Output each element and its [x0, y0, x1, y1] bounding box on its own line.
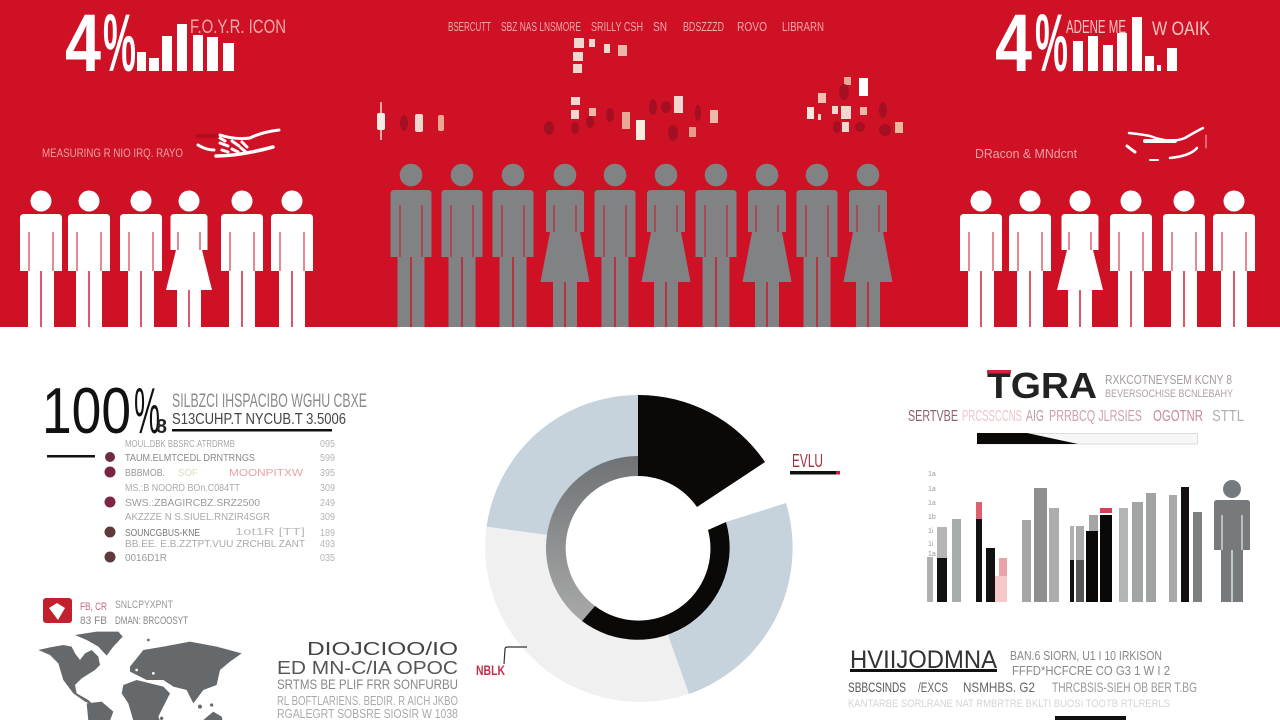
top centre caption: SN — [653, 19, 667, 34]
sub heading line: OGOTNR — [1153, 408, 1203, 425]
list rows: MS.:B NOORD BOn.C084TT — [125, 482, 240, 494]
list rows: TAUM.ELMTCEDL DRNTRNGS — [125, 452, 255, 464]
description text: RXKCOTNEYSEM KCNY 8 — [1105, 372, 1232, 387]
panel: centre-left text block: RL BOFTLARIENS. BEDIR. R AICH JKBO — [277, 693, 458, 708]
left top label: F.O.Y.R. ICON — [190, 17, 286, 38]
heading underline — [850, 669, 997, 672]
map legend text: 83 FB — [80, 615, 107, 627]
panel: centre-left text block: ED MN-C/IA OPOC — [277, 658, 458, 678]
left rule — [47, 455, 95, 458]
map legend text: FB, CR — [80, 601, 107, 613]
sub heading line: AIG — [1026, 408, 1044, 425]
list rows: AKZZZE N S.SIUEL.RNZIR4SGR — [125, 511, 270, 523]
scattered small icons — [377, 38, 903, 141]
right top label: W OAIK — [1152, 19, 1210, 40]
segment: lower-left light grey — [485, 527, 689, 702]
left big statistic 4%: 4 — [65, 0, 101, 89]
bottom right heading: HVIIJODMNA — [850, 646, 997, 674]
donut chart — [476, 395, 840, 702]
icon: right shoe squiggle — [1127, 128, 1206, 160]
right big statistic 4% — [995, 0, 1177, 89]
bold summary line: /EXCS — [918, 679, 948, 695]
map legend text — [80, 599, 188, 627]
y axis labels: 1b — [928, 514, 936, 521]
list rows: MOONPITXW — [229, 467, 303, 479]
donut label left: NBLK — [476, 662, 505, 678]
y axis labels — [928, 471, 936, 558]
sub heading line: PRCSSCCNS — [962, 408, 1022, 425]
list rows: 599 — [320, 453, 335, 464]
heading total: TGRA — [987, 365, 1097, 406]
left big statistic 4% — [65, 0, 234, 89]
y axis labels: 1a — [928, 551, 936, 558]
list rows: BB.EE. E.B.ZZTPT.VUU ZRCHBL ZANT — [125, 538, 306, 550]
bold summary line — [848, 679, 1197, 695]
list rows: 309 — [320, 483, 335, 494]
top centre caption: BSERCUTT — [448, 19, 491, 34]
donut label right: EVLU — [792, 451, 823, 471]
list rows: 249 — [320, 498, 335, 509]
faint footnote: KANTARBE SORLRANE NAT RMBRTRE BKLTI BUOSI TOOTB RTLRERLS — [848, 698, 1170, 710]
map legend text: DMAN: BRCOOSYT — [115, 615, 188, 627]
left sub label: MEASURING R NIO IRQ. RAYO — [42, 146, 183, 160]
list rows: 309 — [320, 512, 335, 523]
description text — [1105, 372, 1234, 400]
bold summary line: SBBCSINDS — [848, 679, 906, 695]
list rows: SWS.:ZBAGIRCBZ.SRZ2500 — [125, 497, 260, 509]
panel: centre-left text block: SRTMS BE PLIF FRR SONFURBU — [277, 676, 458, 692]
description lines — [1010, 649, 1170, 678]
sub heading line: STTL — [1212, 408, 1244, 425]
list rows — [104, 438, 335, 564]
right sub label: DRacon & MNdcnt — [975, 146, 1077, 161]
left big statistic 4%: % — [103, 0, 136, 89]
list sub heading: S13CUHP.T NYCUB.T 3.5006 — [172, 411, 346, 428]
right top label — [1066, 17, 1210, 40]
description lines: FFFD*HCFCRE CO G3 1 W I 2 — [1012, 664, 1170, 678]
top centre caption: SBZ NAS LNSMORE — [501, 19, 581, 34]
bar chart — [927, 471, 1250, 602]
inner ring: grey arc — [546, 456, 638, 621]
top centre caption: BDSZZZD — [683, 19, 724, 34]
progress bar — [977, 433, 1198, 444]
list rows: 189 — [320, 528, 335, 539]
panel: centre-left text block: DIOJCIOO/IO — [307, 639, 458, 659]
y axis labels: 1a — [928, 500, 936, 507]
top centre caption — [448, 19, 824, 34]
panel: red top band — [0, 0, 1280, 327]
y axis labels: 1a — [928, 471, 936, 478]
list rows: 493 — [320, 539, 335, 550]
bold summary line: NSMHBS. G2 — [963, 679, 1035, 695]
y axis labels: 1i — [928, 541, 934, 548]
icon: red badge — [43, 598, 72, 623]
centre group of grey people — [390, 164, 892, 327]
sub heading line — [908, 408, 1244, 425]
sub heading line: PRRBCQ JLRSIES — [1049, 408, 1142, 425]
sub heading line: SERTVBE — [908, 408, 958, 425]
heading rule — [172, 429, 332, 432]
bars — [927, 487, 1202, 602]
map legend text: SNLCPYXPNT — [115, 599, 173, 611]
y axis labels: 1a — [928, 486, 936, 493]
segment: right blue — [668, 503, 793, 694]
y axis labels: 1i — [928, 528, 934, 535]
panel: bottom right text block — [848, 646, 1197, 720]
list heading text: SILBZCI IHSPACIBO WGHU CBXE — [172, 391, 367, 412]
black footer tab — [1055, 716, 1126, 720]
panel: 100% statistic and list — [42, 374, 367, 564]
panel: world map block — [38, 598, 242, 720]
right top label: ADENE ME — [1066, 17, 1126, 37]
icon: grey person — [1214, 480, 1250, 602]
list rows: SOF — [178, 467, 198, 479]
segment: black wedge — [638, 395, 765, 507]
icon: left shoe squiggle — [197, 130, 279, 156]
world map — [38, 632, 242, 720]
top centre caption: ROVO — [737, 19, 767, 34]
list rows: 095 — [320, 439, 335, 450]
list rows: BBBMOB. — [125, 467, 165, 479]
panel: 100% statistic and list: % — [134, 374, 160, 447]
heading 100%: 100 — [42, 374, 131, 447]
top centre caption: SRILLY CSH — [591, 19, 643, 34]
list rows: SOUNCGBUS-KNE — [125, 527, 200, 539]
list rows: MOUL.DBK BBSRC.ATRDRMB — [125, 438, 235, 450]
inner ring: black arc — [582, 522, 730, 640]
left group of white people — [20, 190, 313, 327]
panel: total block top right — [908, 365, 1244, 444]
list rows: 1ot1R [TT] — [235, 526, 305, 538]
right big statistic 4%: 4 — [995, 0, 1032, 89]
donut label rule — [790, 471, 840, 474]
top centre caption: LIBRARN — [782, 19, 824, 34]
list rows: 0016D1R — [125, 552, 167, 564]
small mark beside heading: 8 — [156, 416, 167, 438]
right big statistic 4%: % — [1035, 0, 1068, 89]
description text: BEVERSOCHISE BCNLEBAHY — [1105, 388, 1234, 400]
bold summary line: THRCBSIS-SIEH OB BER T.BG — [1052, 679, 1197, 695]
segment: upper-left blue — [486, 395, 638, 535]
list rows: 395 — [320, 468, 335, 479]
leader line — [504, 647, 527, 664]
right group of white people — [960, 190, 1255, 327]
list rows: 035 — [320, 553, 335, 564]
description lines: BAN.6 SIORN, U1 I 10 IRKISON — [1010, 649, 1162, 663]
panel: centre-left text block — [277, 639, 458, 720]
